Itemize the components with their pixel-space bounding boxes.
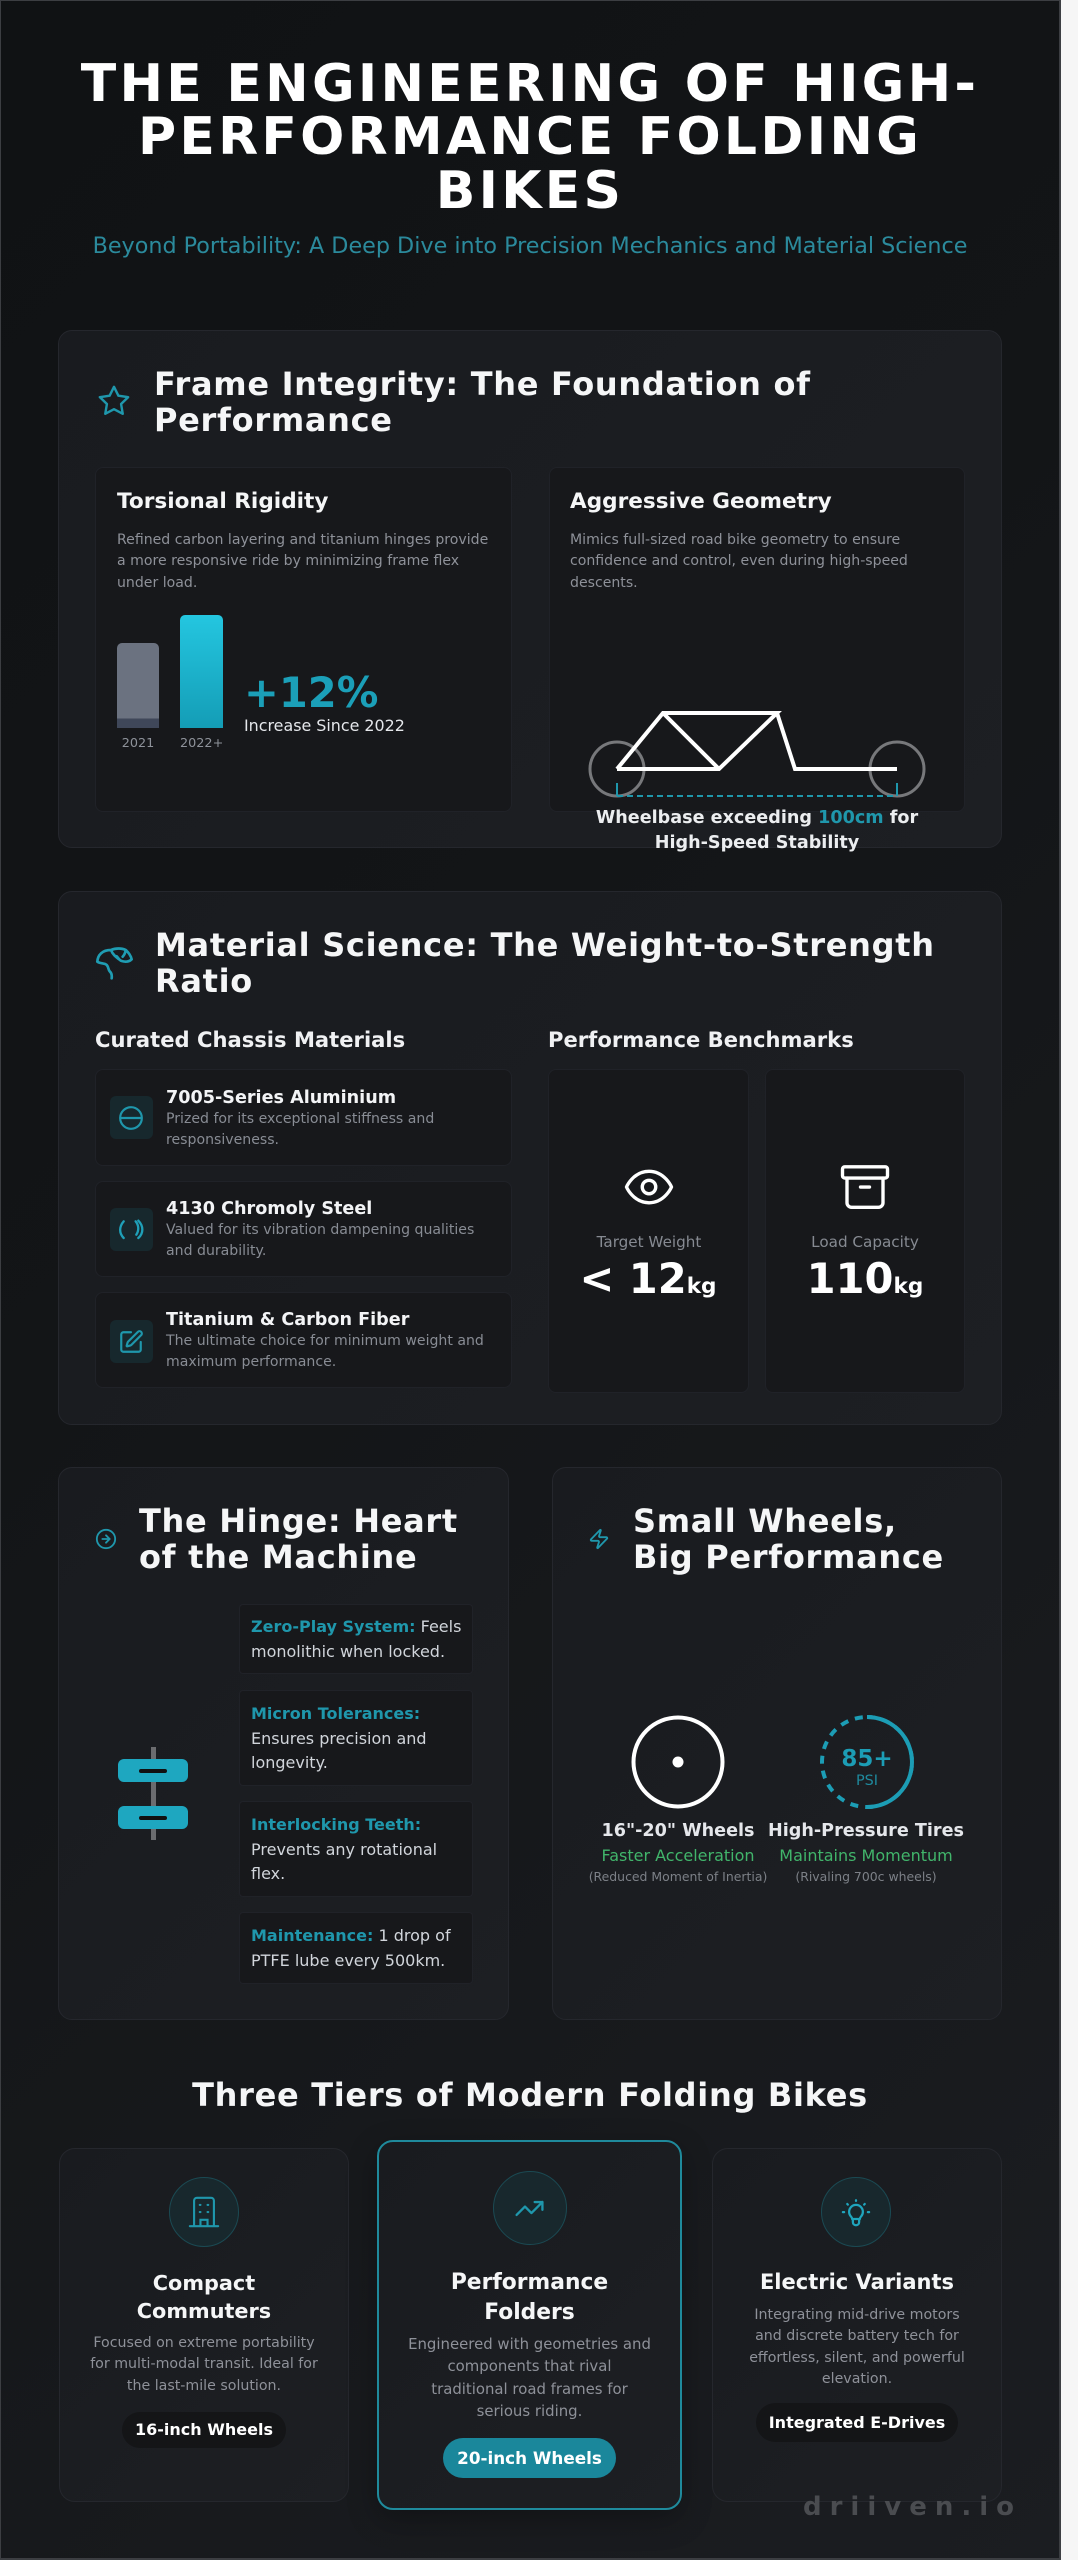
icon circle: lightbulb xyxy=(821,2177,891,2247)
icon: building xyxy=(188,2196,220,2228)
panel: aggressive geometry xyxy=(549,467,965,812)
label: 2022+: 2022+ xyxy=(180,736,223,751)
list item: maintenance xyxy=(239,1912,473,1984)
text: titanium: maximum performance. xyxy=(166,1354,336,1370)
icon box: aluminium xyxy=(110,1096,153,1139)
text: aggressive geometry description: confidence and control, even during high-speed xyxy=(570,553,908,569)
bar: 2022+ xyxy=(180,615,223,728)
heading: material science xyxy=(155,926,935,1000)
value: target weight: < 12kg xyxy=(579,1254,717,1303)
text: steel: 4130 Chromoly Steel xyxy=(166,1199,372,1219)
caption: wheelbase xyxy=(596,808,918,853)
panel: material science xyxy=(58,891,1002,1425)
bar chart: rigidity xyxy=(117,615,223,751)
description: performance folders: components that rival xyxy=(447,2357,612,2375)
icon circle: building xyxy=(169,2177,239,2247)
heading: hinge: The Hinge: Heart xyxy=(139,1502,458,1540)
list item: interlocking xyxy=(239,1801,473,1897)
gauge: 85+ PSI xyxy=(820,1715,914,1809)
caption: wheelbase: Wheelbase exceeding 100cm for xyxy=(596,808,918,828)
text: torsional rigidity description: Refined carbon layering and titanium hinges provide xyxy=(117,532,488,548)
text: titanium: Titanium & Carbon Fiber xyxy=(166,1310,409,1330)
heading: three tiers: Three Tiers of Modern Folding Bikes xyxy=(192,2076,868,2114)
stat: +12%: +12% xyxy=(244,668,378,717)
subtitle: Beyond Portability: A Deep Dive into Precision Mechanics and Material Science xyxy=(93,233,967,259)
text: zero-play: monolithic when locked. xyxy=(251,1642,445,1660)
heading: performance benchmarks: Performance Benchmarks xyxy=(548,1027,854,1052)
text: torsional rigidity description: a more responsive ride by minimizing frame flex xyxy=(117,553,459,569)
icon: lightbulb xyxy=(842,2199,870,2226)
panel: frame integrity xyxy=(58,330,1002,848)
description: performance folders: Engineered with geometries and xyxy=(408,2335,651,2353)
title: THE ENGINEERING OF HIGH- xyxy=(81,54,979,114)
description: electric variants: and discrete battery tech for xyxy=(755,2328,959,2344)
title: performance folders: Performance xyxy=(451,2270,608,2295)
heading: hinge: of the Machine xyxy=(139,1538,417,1576)
material: titanium and carbon xyxy=(95,1292,512,1388)
text: steel xyxy=(166,1199,474,1259)
description: electric variants: effortless, silent, and powerful xyxy=(749,2350,965,2366)
text: zero-play xyxy=(251,1617,461,1660)
title: compact commuters: Compact xyxy=(153,2271,255,2295)
icon: archive box xyxy=(840,1165,890,1209)
text: interlocking xyxy=(251,1815,437,1883)
description: performance folders xyxy=(408,2335,651,2420)
tier: performance folders xyxy=(377,2140,682,2510)
tier: electric variants xyxy=(712,2148,1002,2502)
heading: frame integrity: Performance xyxy=(154,401,393,439)
icon: trending up xyxy=(515,2200,544,2216)
diagram: bike geometry xyxy=(588,711,926,798)
material: chromoly steel xyxy=(95,1181,512,1277)
title: electric variants: Electric Variants xyxy=(760,2270,954,2294)
text: maintenance: PTFE lube every 500km. xyxy=(251,1950,445,1970)
heading: small wheels: Small Wheels, xyxy=(633,1502,897,1540)
heading: small wheels xyxy=(633,1502,944,1576)
icon: brain xyxy=(96,947,133,980)
pill: 16-inch xyxy=(122,2412,286,2448)
watermark: driiven.io xyxy=(803,2492,1022,2522)
heading: torsional rigidity: Torsional Rigidity xyxy=(117,489,328,514)
text: maintenance: Maintenance: 1 drop of xyxy=(251,1926,451,1945)
text: torsional rigidity description: under load. xyxy=(117,575,197,591)
description: performance folders: serious riding. xyxy=(477,2402,582,2420)
text: interlocking: Interlocking Teeth: xyxy=(251,1815,421,1834)
title: PERFORMANCE FOLDING xyxy=(138,107,922,167)
label: tires: High-Pressure Tires xyxy=(768,1821,964,1841)
label: wheels: 16"-20" Wheels xyxy=(601,1821,755,1841)
icon box: titanium xyxy=(110,1320,153,1363)
panel: torsional rigidity xyxy=(95,467,512,812)
benchmark: target weight xyxy=(548,1069,749,1393)
label: 2021: 2021 xyxy=(122,736,154,751)
icon: wheel xyxy=(632,1716,724,1808)
note: rivaling: (Rivaling 700c wheels) xyxy=(795,1869,937,1884)
heading: small wheels: Big Performance xyxy=(633,1538,944,1576)
tier: compact commuters xyxy=(59,2148,349,2502)
icon: circle line xyxy=(119,1106,143,1130)
text: aluminium: responsiveness. xyxy=(166,1132,279,1148)
text: aggressive geometry description xyxy=(570,532,908,591)
description: electric variants: elevation. xyxy=(822,2371,892,2387)
stat caption: Increase Since 2022 xyxy=(244,716,405,735)
title: performance folders: Folders xyxy=(484,2300,575,2325)
title xyxy=(81,54,979,221)
heading: material science: Material Science: The Weight-to-Strength xyxy=(155,926,935,964)
icon: bolt xyxy=(590,1528,608,1550)
text: aggressive geometry description: descents. xyxy=(570,575,638,591)
panel: hinge xyxy=(58,1467,509,2020)
text: micron: Micron Tolerances: xyxy=(251,1704,420,1723)
benefit: momentum: Maintains Momentum xyxy=(779,1846,953,1865)
heading: frame integrity: Frame Integrity: The Foundation of xyxy=(154,365,811,403)
pill: e-drives: Integrated E-Drives xyxy=(769,2413,945,2432)
pill: 20-inch: 20-inch Wheels xyxy=(457,2448,602,2468)
label: load capacity: Load Capacity xyxy=(811,1233,919,1251)
icon circle: trending xyxy=(493,2171,567,2245)
description: electric variants xyxy=(749,2307,965,2387)
value: 85+: 85+ xyxy=(841,1746,893,1772)
description: performance folders: traditional road frames for xyxy=(431,2380,628,2398)
icon: pen square xyxy=(120,1330,143,1353)
text: steel: and durability. xyxy=(166,1243,266,1259)
value: load capacity: 110kg xyxy=(807,1254,923,1303)
description: compact commuters: Focused on extreme portability xyxy=(93,2335,315,2351)
text: interlocking: flex. xyxy=(251,1864,285,1883)
caption: wheelbase: High-Speed Stability xyxy=(655,833,859,853)
text: titanium xyxy=(166,1310,484,1370)
title: compact commuters: Commuters xyxy=(137,2299,271,2323)
diagram: hinge xyxy=(118,1747,188,1840)
benchmark: load capacity xyxy=(765,1069,965,1393)
heading: aggressive geometry: Aggressive Geometry xyxy=(570,489,832,514)
text: interlocking: Prevents any rotational xyxy=(251,1840,437,1858)
icon: star xyxy=(98,386,130,415)
text: torsional rigidity description xyxy=(117,532,488,591)
icon: eye xyxy=(624,1170,674,1204)
text: titanium: The ultimate choice for minimum weight and xyxy=(166,1333,484,1349)
heading: hinge xyxy=(139,1502,458,1576)
description: compact commuters xyxy=(90,2335,318,2394)
icon: vibration xyxy=(119,1219,144,1240)
icon box: steel xyxy=(110,1208,153,1251)
title: BIKES xyxy=(436,161,624,221)
icon: arrow circle xyxy=(96,1528,116,1550)
description: compact commuters: for multi-modal transit. Ideal for xyxy=(90,2356,318,2372)
text: micron: Ensures precision and xyxy=(251,1728,427,1748)
text: zero-play: Zero-Play System: Feels xyxy=(251,1617,461,1636)
title: compact commuters xyxy=(137,2271,271,2323)
unit: PSI: PSI xyxy=(856,1773,878,1789)
bar: 2021 xyxy=(117,643,159,728)
heading: curated chassis materials: Curated Chassis Materials xyxy=(95,1027,405,1052)
text: aggressive geometry description: Mimics full-sized road bike geometry to ensure xyxy=(570,532,900,548)
list item: zero-play xyxy=(239,1604,473,1674)
pill: 16-inch: 16-inch Wheels xyxy=(135,2420,273,2439)
benefit: acceleration: Faster Acceleration xyxy=(601,1846,755,1865)
text: aluminium xyxy=(166,1088,434,1148)
description: compact commuters: the last-mile solution. xyxy=(127,2378,281,2394)
text: micron: longevity. xyxy=(251,1753,328,1772)
description: electric variants: Integrating mid-drive motors xyxy=(754,2307,960,2323)
material: aluminium xyxy=(95,1069,512,1166)
text: micron xyxy=(251,1704,427,1772)
note: inertia: (Reduced Moment of Inertia) xyxy=(589,1869,767,1884)
list item: micron xyxy=(239,1690,473,1786)
heading: material science: Ratio xyxy=(155,962,253,1000)
title: performance folders xyxy=(451,2270,608,2325)
text: aluminium: Prized for its exceptional stiffness and xyxy=(166,1111,434,1127)
text: maintenance xyxy=(251,1926,451,1970)
pill: e-drives xyxy=(756,2403,958,2442)
text: aluminium: 7005-Series Aluminium xyxy=(166,1088,396,1108)
pill: 20-inch xyxy=(443,2438,616,2478)
heading: frame integrity xyxy=(154,365,811,439)
panel: small wheels xyxy=(552,1467,1002,2020)
text: steel: Valued for its vibration dampening qualities xyxy=(166,1222,474,1238)
label: target weight: Target Weight xyxy=(597,1233,701,1251)
